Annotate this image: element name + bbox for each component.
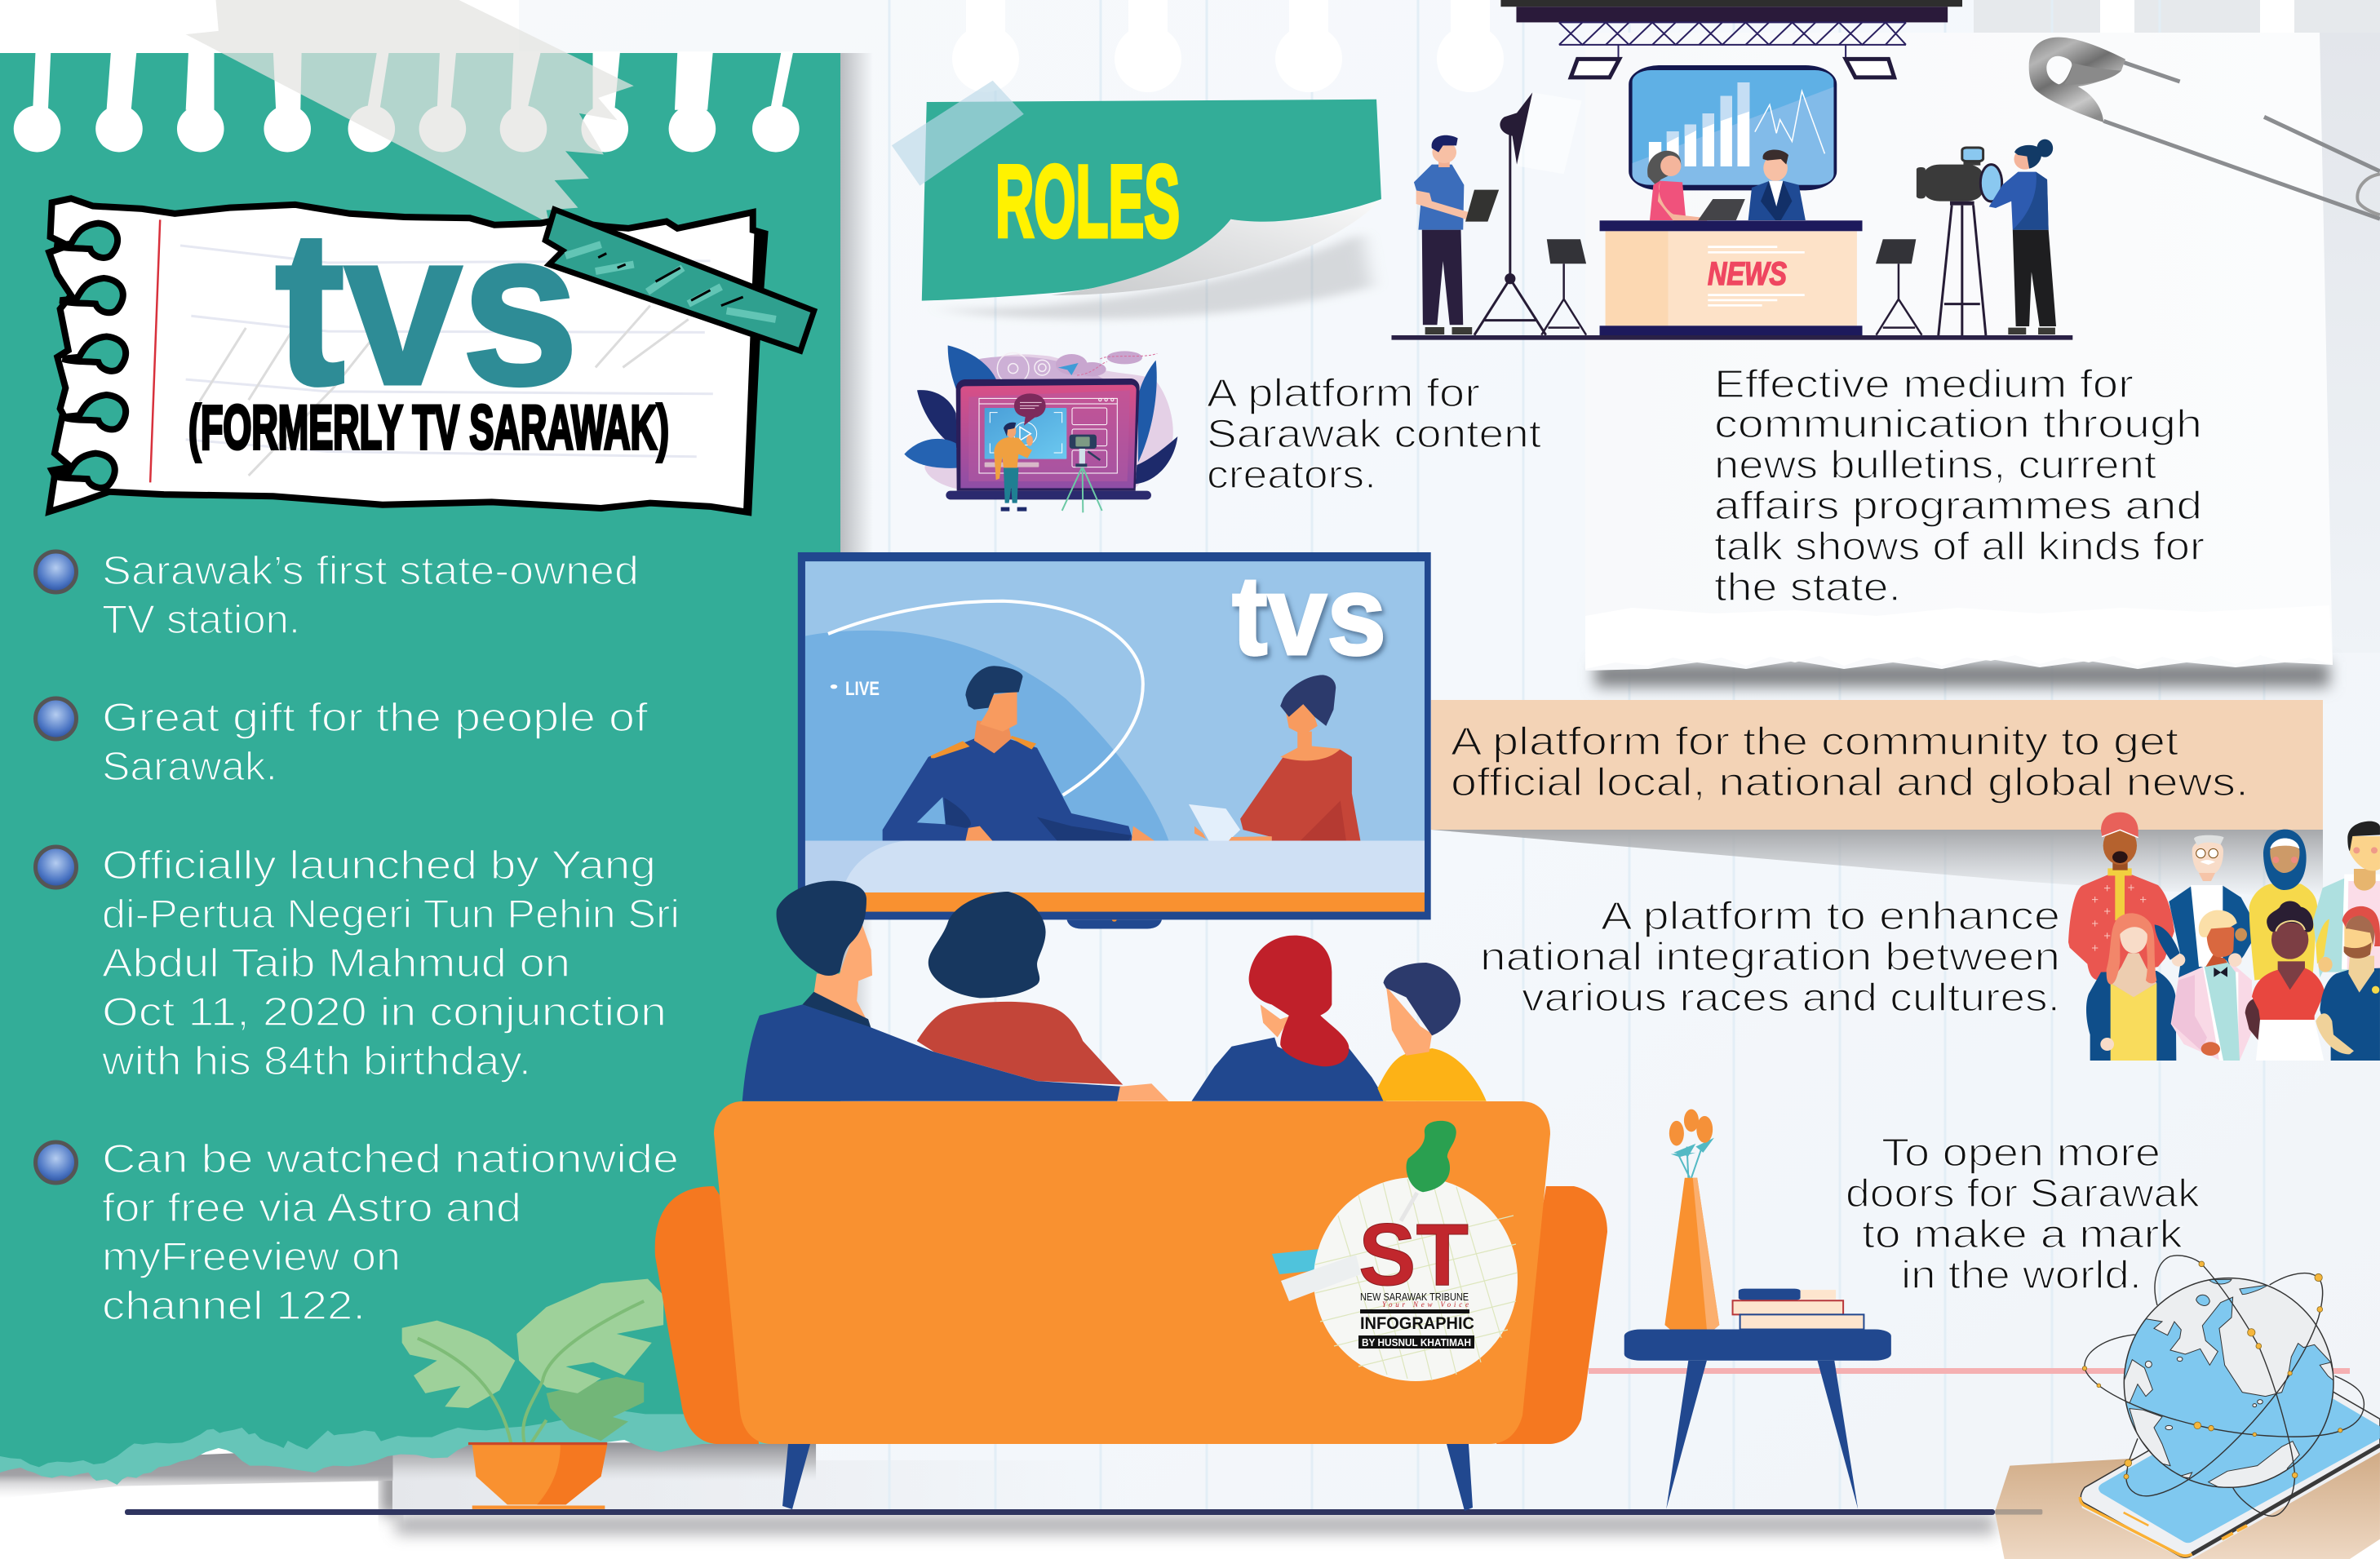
bullet 2: Sarawak. [102,745,277,789]
text: content creators role [1207,372,1541,497]
bullet 3: di-Pertua Negeri Tun Pehin Sri [102,892,680,937]
illustration: diverse people [2068,813,2380,1061]
left stand light [1541,239,1586,335]
male anchor [1748,150,1806,220]
text: effective medium role: talk shows of all kinds for [1714,525,2205,569]
man in aqua jacket [2313,822,2380,977]
laptop [1698,199,1745,220]
girl [1191,936,1386,1101]
tribune name: NEW SARAWAK TRIBUNE [1360,1291,1469,1303]
monstera leaves [547,1377,644,1441]
bearded man in red beret [2316,906,2380,1061]
red-haired woman [2086,913,2176,1061]
illustration: orange sofa [655,1101,1607,1511]
man [742,881,1168,1101]
background blob [924,354,1173,489]
torn lighter edge [0,1387,816,1485]
paper bag [1995,1446,2380,1559]
callout: community news: A platform for the community to get [1451,720,2178,764]
bullet 3: Oct 11, 2020 in conjunction [102,990,667,1034]
flowers [1678,1144,1703,1178]
heading text: roles: ROLES [995,145,1180,259]
video frame [985,408,1066,459]
text: open more doors role [1846,1132,2201,1297]
slogan: Your New Voice [1382,1300,1469,1309]
torn paper [49,198,765,512]
illustration: globe on phone [1995,1256,2380,1559]
blond man with bow tie [2171,910,2252,1061]
panel drop shadow [840,53,873,1114]
female anchor [1189,675,1360,841]
illustration: family watching tv [742,881,1487,1101]
text: content creators role: A platform for [1207,372,1480,415]
illustration: potted plant [402,1279,663,1509]
old man with glasses [2155,835,2258,977]
globe land masses [2125,1278,2333,1486]
news desk [805,841,1425,892]
safety pin [2029,38,2380,219]
lighting rig [1500,0,1962,78]
bullet 1 [36,549,639,642]
illustration: news studio [1391,65,2072,340]
bullet 3: Officially launched by Yang [102,844,656,888]
bottom torn shadow [0,1442,816,1499]
sticker: ST infographic badge [1272,1121,1518,1381]
panel body [0,53,840,1387]
laptop [956,379,1140,491]
translucent torn tape strip [186,0,634,224]
text: effective medium role: news bulletins, current [1714,444,2156,487]
text: national integration role: various races and cultures. [1522,977,2060,1020]
phone [2080,1368,2380,1559]
creator figure [994,423,1033,512]
arms [655,1186,759,1444]
table top and legs [1624,1330,1891,1361]
bullet 4: channel 122. [102,1284,366,1328]
green tape [545,210,814,351]
notebook holes along top of page [952,0,2294,92]
orbits [2085,1256,2364,1516]
clouds and plane [1056,351,1157,376]
text: effective medium role: the state. [1714,566,1901,609]
text: content creators role: creators. [1207,454,1376,497]
legs [782,1444,810,1509]
globe [2124,1278,2333,1487]
bullet 1: Sarawak’s first state-owned [102,549,639,593]
camera on tripod [1917,148,2002,335]
right stand light [1876,239,1921,335]
studio screen [1629,65,1837,190]
illustration: side table with vase and books [1624,1109,1891,1509]
sticker: ST infographic badge: BY HUSNUL KHATIMAH [1362,1337,1471,1349]
spiral loops [52,224,126,488]
heading: roles sticky note [892,81,1381,319]
curled corner [1051,199,1381,295]
male anchor [883,666,1155,841]
pot [472,1445,607,1504]
news desk [1600,220,1863,337]
bullet 2 [36,696,648,789]
female anchor [1647,151,1707,221]
tvs logo on screen: tvs [1232,553,1386,679]
tape pieces [1272,1248,1335,1274]
subtitle: formerly TV Sarawak: (FORMERLY TV SARAWAK) [188,393,669,463]
text: open more doors role: in the world. [1901,1254,2142,1297]
woman with afro [2245,901,2325,1061]
text: open more doors role: doors for Sarawak [1846,1172,2201,1216]
spiral binding holes on teal panel [14,51,800,152]
bullet 2: Great gift for the people of [102,696,648,740]
ST letters: ST [1358,1205,1469,1304]
bullet 4: for free via Astro and [102,1186,521,1230]
camera on tripod [1062,435,1102,512]
frame and screen [798,552,1431,919]
text: open more doors role: To open more [1881,1132,2161,1175]
panel: teal intro sheet [0,53,840,1485]
title note card [49,198,814,512]
red margin [150,219,160,482]
text: effective medium role: affairs programmes and [1714,485,2202,528]
text: open more doors role: to make a mark [1862,1213,2183,1256]
ruled lines and scribbles [180,246,713,476]
stand [1067,919,1162,929]
text: effective medium role [1714,363,2205,609]
leaves [904,345,1177,484]
text: effective medium role: communication through [1714,403,2202,446]
note body [922,100,1381,301]
text: content creators role: Sarawak content [1207,413,1541,456]
bullet 4: myFreeview on [102,1235,401,1279]
green push pin [1401,1121,1456,1221]
bullet 3: Abdul Taib Mahmud on [102,941,570,985]
studio wave [805,631,1168,841]
live label: LIVE [845,678,880,700]
infographic label: INFOGRAPHIC [1360,1314,1474,1333]
text: national integration role [1480,895,2060,1020]
back and seat [714,1101,1550,1444]
woman [917,892,1123,1085]
floor line [125,1509,1995,1515]
text: effective medium role: Effective medium for [1714,363,2134,406]
panel: torn paper for news role [1585,33,2333,687]
orbit nodes [2082,1261,2342,1479]
vase [1664,1178,1719,1330]
bullet 4: Can be watched nationwide [102,1137,679,1181]
text: national integration role: national integration between [1480,936,2060,979]
woman in hijab [2249,830,2317,981]
transparent tape [892,81,1024,186]
gears [997,352,1050,384]
live dot [831,684,837,689]
books [1739,1289,1801,1300]
floor [1391,335,2072,340]
boy [1377,963,1487,1101]
floor line seen through bag [1995,1509,2042,1515]
byline [1358,1335,1474,1349]
callout: community news [1431,700,2323,897]
camera operator [1989,140,2056,334]
bullet 1: TV station. [102,598,300,642]
tvs logo: tvs [275,185,578,431]
bullet 4 [36,1137,679,1328]
speech bubble [1014,393,1046,426]
man in turban [2068,813,2174,981]
text: news desk logo: NEWS [1708,256,1787,292]
wall stripe [1589,1368,2350,1374]
illustration: content creator laptop [904,345,1177,512]
bullet list [36,549,680,1328]
round paper [1314,1177,1518,1381]
crew member with clipboard [1414,135,1499,334]
text: national integration role: A platform to enhance [1601,895,2060,938]
soft light [1474,92,1582,335]
bullet 3: with his 84th birthday. [101,1039,531,1083]
callout: community news: official local, national and global news. [1451,761,2249,804]
illustration: tv set [798,552,1431,929]
bullet 3 [36,844,680,1083]
